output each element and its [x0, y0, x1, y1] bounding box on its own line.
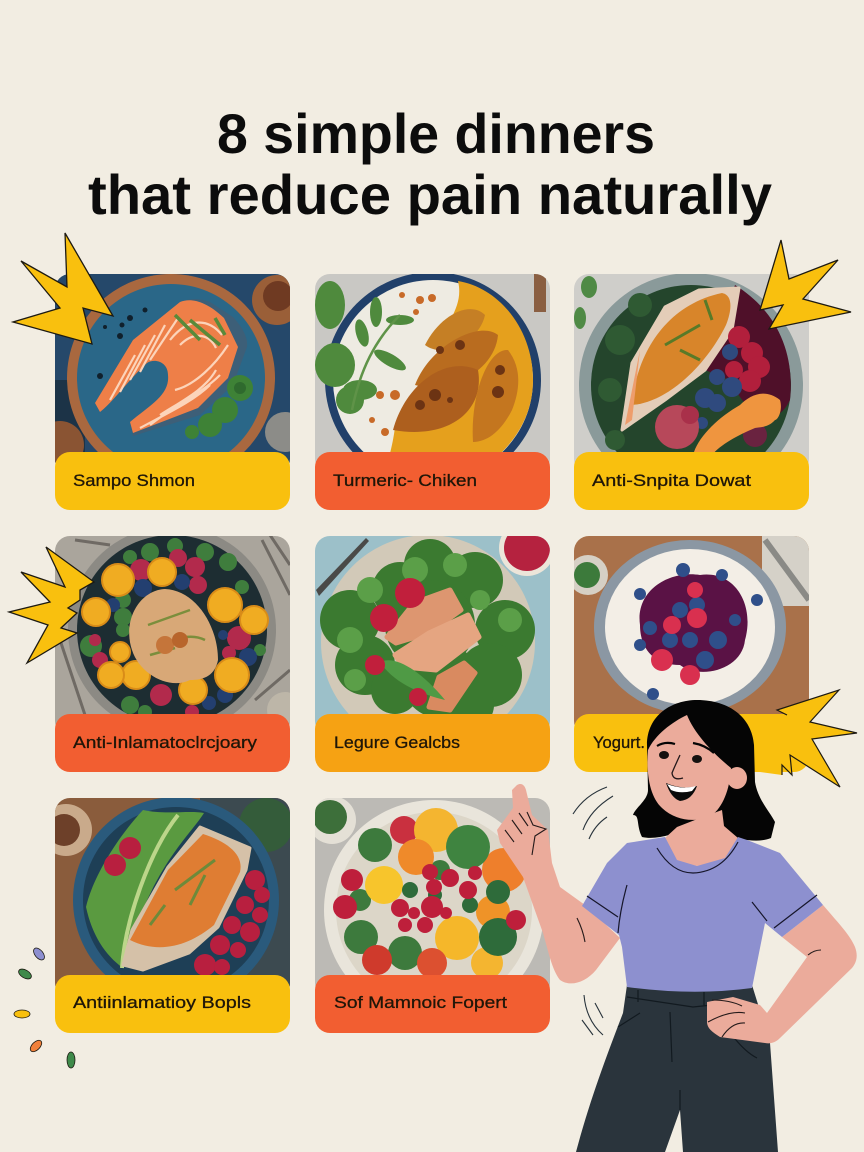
title: 8 simple dinners: [217, 102, 655, 165]
shirt: [582, 837, 823, 992]
panel: chicken and squash plate: [55, 526, 303, 772]
label: Legure Gealcbs: [315, 714, 550, 772]
ear: [727, 767, 747, 789]
panel: salmon dinner: [55, 274, 290, 510]
icon: burst top left: [13, 233, 113, 344]
title: [88, 102, 772, 226]
panel: salmon and berries bowl: [574, 273, 809, 510]
panel: green salad with chicken: [315, 520, 555, 772]
label: Sampo Shmon: Sampo Shmon: [73, 471, 195, 490]
head: [648, 715, 731, 820]
label: Anti-Inlamatoclrcjoary: [55, 714, 290, 772]
label: Anti-Inlamatoclrcjoary: Anti-Inlamatoclrcjoary: [73, 733, 258, 752]
label: Anti-Snpita Dowat: Anti-Snpita Dowat: [592, 471, 751, 490]
icon: burst middle left: [9, 547, 94, 663]
label: Turmeric- Chiken: [315, 452, 550, 510]
label: Yogurt: Yogurt.: [593, 733, 645, 752]
panel: turmeric chicken: [315, 272, 550, 510]
label: Sampo Shmon: [55, 452, 290, 510]
label: Yogurt: [574, 714, 809, 772]
panel: colourful vegetable salad: [308, 796, 550, 1033]
person illustration: [497, 700, 857, 1152]
title: that reduce pain naturally: [88, 163, 772, 226]
panel: salmon with greens and raspberries: [40, 797, 293, 1033]
neck: [665, 810, 738, 866]
label: Turmeric- Chiken: Turmeric- Chiken: [333, 471, 477, 490]
pants: [576, 985, 778, 1152]
label: Antiinlamatioy Bopls: [55, 975, 290, 1033]
label: Sof Mamnoic Fopert: [315, 975, 550, 1033]
icon: confetti dots: [14, 946, 75, 1068]
label: Anti-Snpita Dowat: [574, 452, 809, 510]
raised arm with hand: [497, 784, 620, 983]
face: brows, eyes, nose and smile: [657, 743, 714, 801]
hair: [633, 700, 775, 841]
panel: yogurt berry bowl: [568, 536, 809, 772]
icon: burst top right: [760, 240, 851, 329]
label: Antiinlamatioy Bopls: Antiinlamatioy Bopls: [73, 993, 251, 1012]
label: Sof Mamnoic Fopert: Sof Mamnoic Fopert: [334, 993, 507, 1012]
label: Legure Gealcbs: Legure Gealcbs: [334, 733, 460, 752]
motion lines: [573, 787, 613, 1035]
arm on hip: [707, 905, 857, 1043]
icon: burst right of person: [740, 690, 857, 787]
